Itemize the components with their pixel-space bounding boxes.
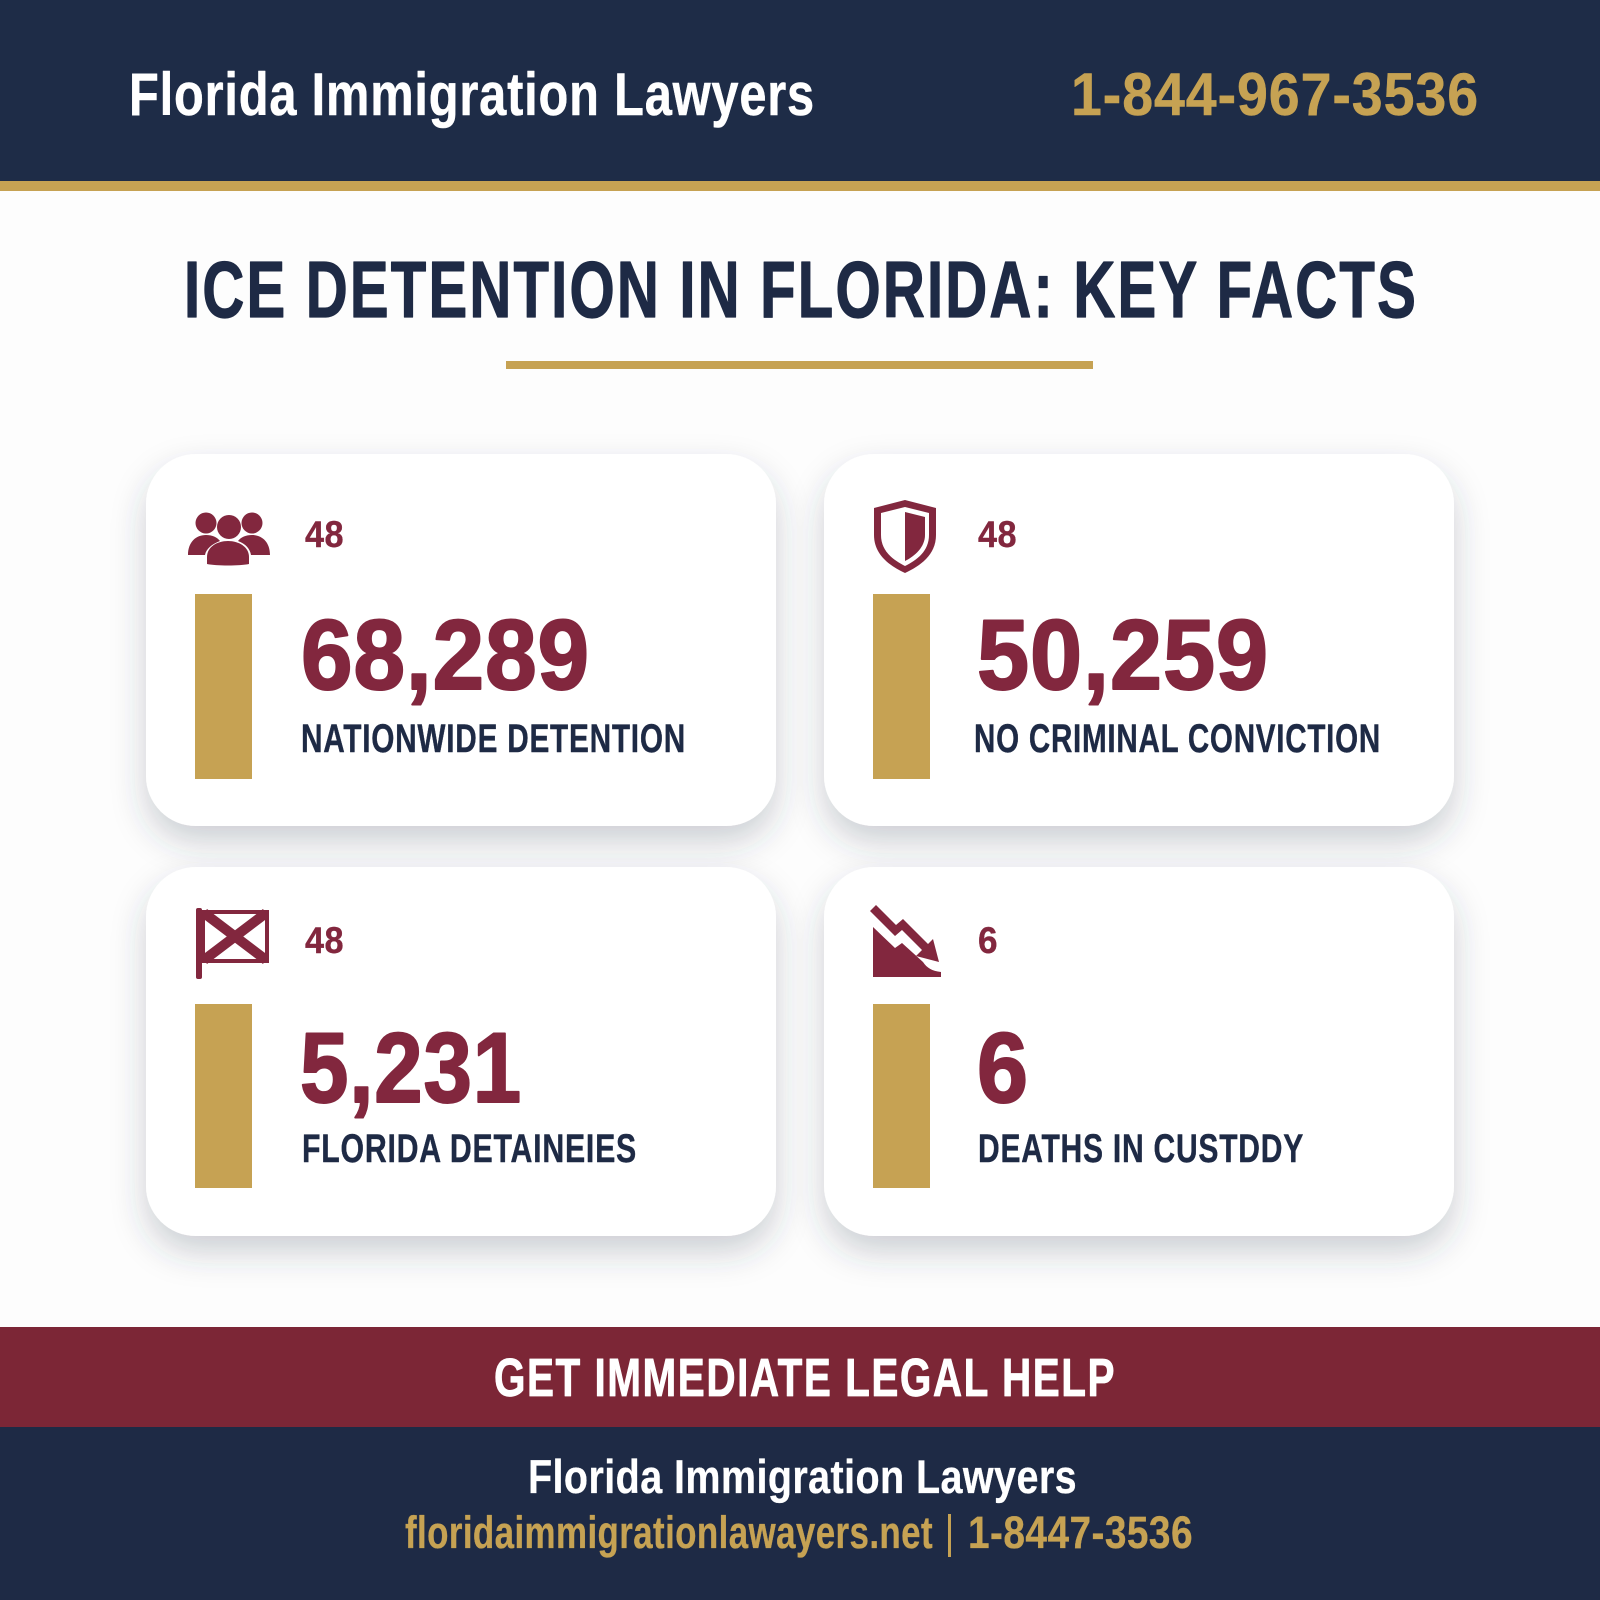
big number: 6: [977, 1012, 1028, 1123]
gold bar: [873, 1004, 930, 1188]
footer separator: [948, 1514, 951, 1557]
panel: nationwide detention: [146, 454, 776, 826]
small figure: 48: [978, 514, 1017, 555]
panel: florida detainees: [146, 867, 776, 1236]
stat label: DEATHS IN CUSTDDY: [978, 1127, 1304, 1171]
call to action band: [0, 1327, 1600, 1427]
icon: people group: [188, 512, 270, 566]
small figure: 6: [978, 920, 998, 961]
big number: 50,259: [977, 599, 1269, 710]
header firm name: Florida Immigration Lawyers: [129, 61, 815, 128]
footer band: [0, 1427, 1600, 1600]
footer phone: 1-8447-3536: [968, 1507, 1193, 1558]
footer website: floridaimmigrationlawayers.net: [405, 1507, 933, 1558]
header phone number: 1-844-967-3536: [1071, 61, 1479, 128]
big number: 5,231: [300, 1012, 522, 1123]
call to action text: GET IMMEDIATE LEGAL HELP: [494, 1348, 1116, 1408]
gold bar: [873, 594, 930, 779]
gold bar: [195, 594, 252, 779]
icon: shield: [874, 500, 936, 573]
big number: 68,289: [301, 599, 590, 710]
stat label: FLORIDA DETAINEIES: [302, 1127, 637, 1171]
stat label: NO CRIMINAL CONVICTION: [974, 717, 1381, 761]
icon: falling chart: [870, 905, 941, 977]
panel: no criminal conviction: [824, 454, 1454, 826]
small figure: 48: [305, 920, 344, 961]
stat label: NATIONWIDE DETENTION: [301, 717, 686, 761]
icon: flag: [196, 908, 267, 979]
header band: [0, 0, 1600, 191]
gold bar: [195, 1004, 252, 1188]
small figure: 48: [305, 514, 344, 555]
footer firm name: Florida Immigration Lawyers: [528, 1450, 1077, 1503]
title underline: [506, 361, 1093, 369]
panel: deaths in custody: [824, 867, 1454, 1236]
